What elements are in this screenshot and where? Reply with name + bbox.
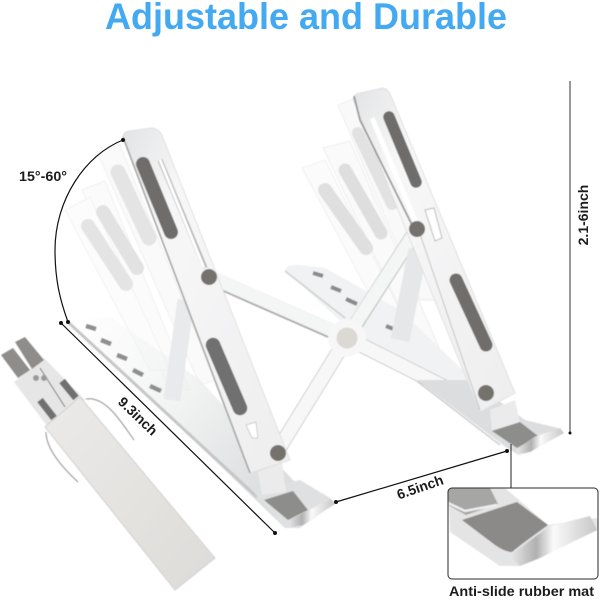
rear right base plate	[285, 265, 520, 445]
length dimension line	[59, 321, 277, 535]
center hinge	[328, 319, 366, 357]
carry bag	[45, 397, 215, 590]
ghost positions of left arm	[65, 145, 215, 390]
left arm	[123, 128, 290, 473]
width label: 6.5inch	[395, 472, 445, 502]
inset caption: Anti-slide rubber mat	[449, 584, 595, 599]
right arm	[353, 88, 515, 412]
right support strut	[400, 250, 418, 340]
height dimension line	[568, 81, 572, 434]
connector to inset	[510, 444, 512, 488]
angle label: 15°-60°	[19, 168, 67, 184]
front left base plate	[69, 316, 312, 528]
height label: 2.1-6inch	[575, 185, 591, 245]
width dimension line	[334, 449, 509, 504]
angle arc 15-60 degrees	[55, 138, 125, 324]
X frame bars	[215, 229, 500, 450]
left foot	[252, 462, 335, 528]
folded stand in bag	[1, 337, 215, 590]
length label: 9.3inch	[115, 393, 161, 439]
ghost positions of right arm	[302, 98, 440, 370]
folded stand	[1, 337, 85, 430]
right base and foot	[417, 380, 564, 455]
laptop stand illustration	[65, 88, 564, 528]
left support strut	[172, 300, 186, 400]
inset: rubber mat detail	[448, 488, 598, 579]
drawstrings	[46, 399, 134, 482]
